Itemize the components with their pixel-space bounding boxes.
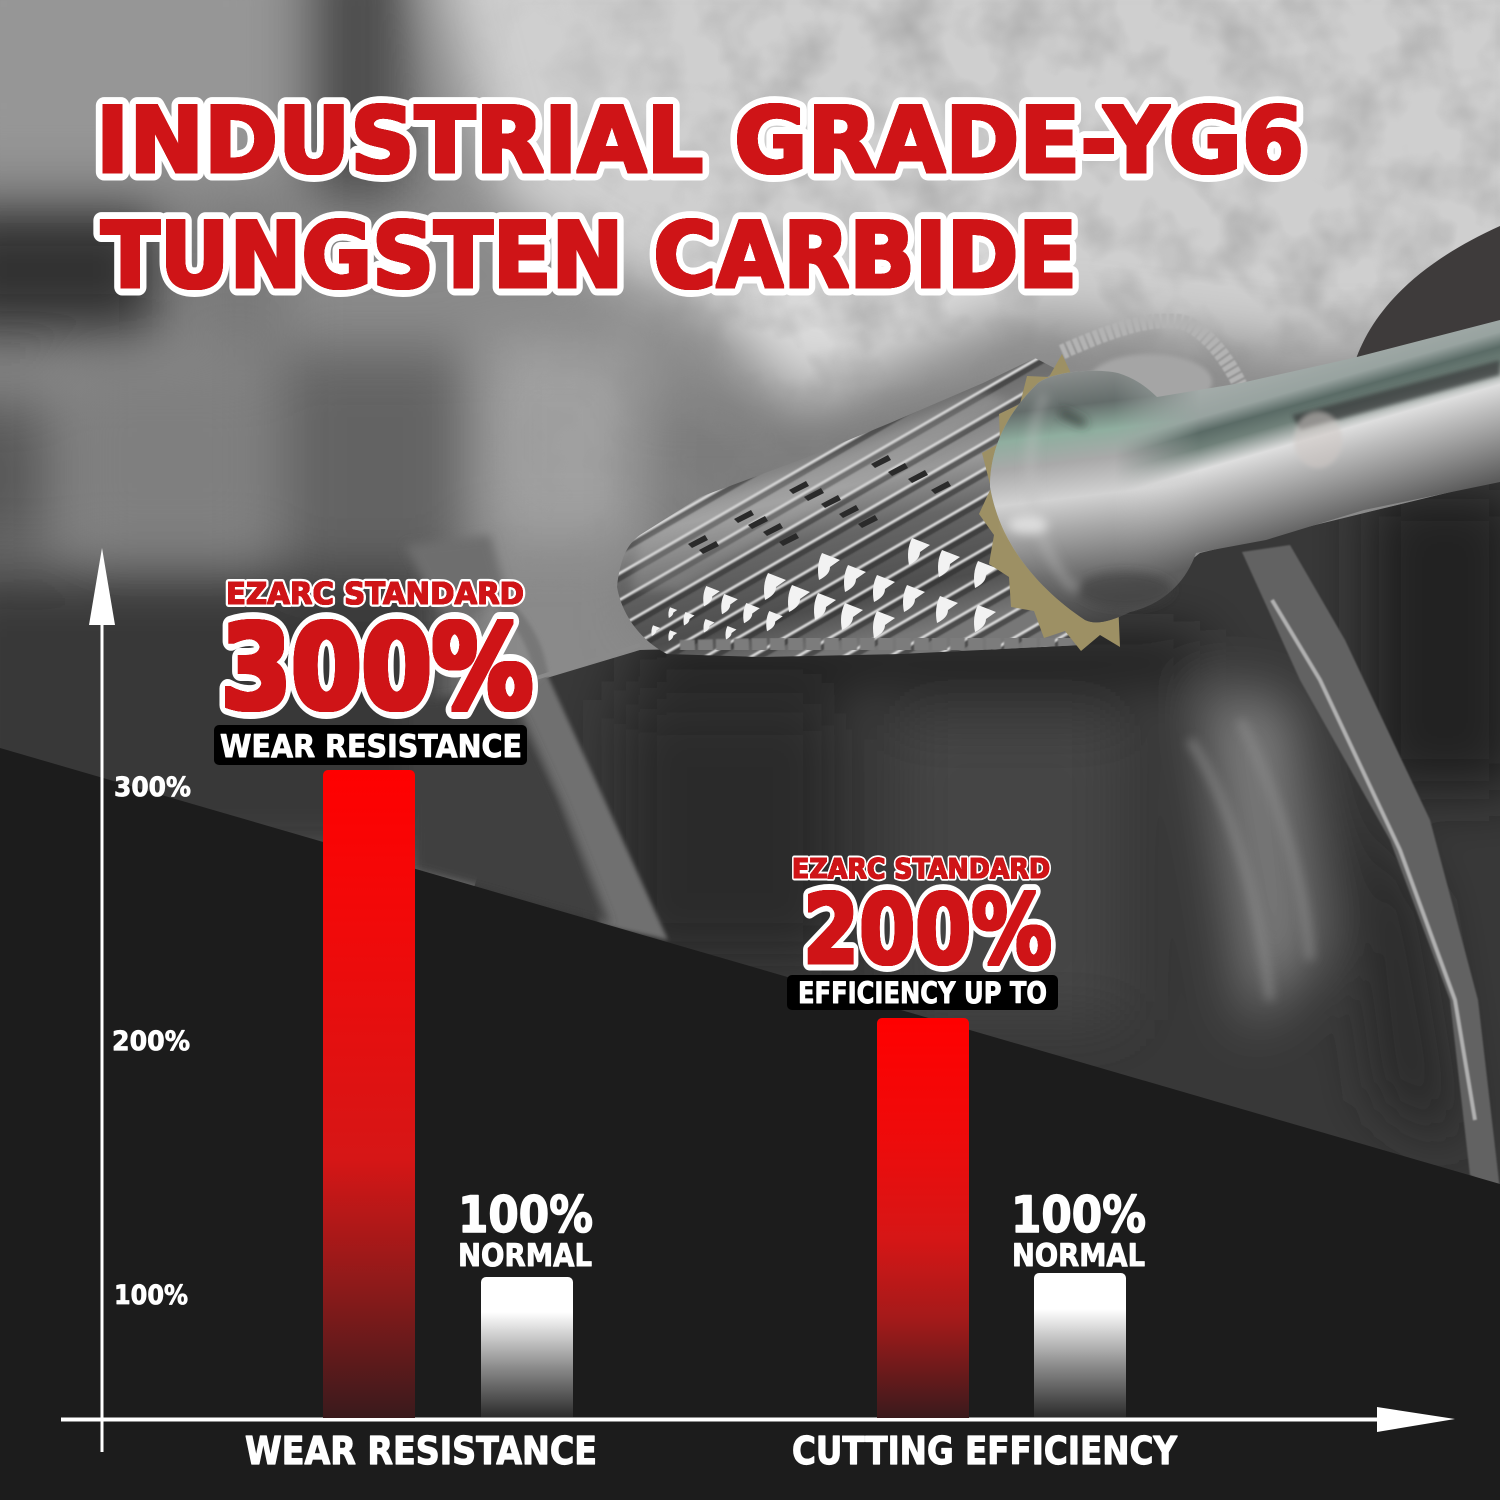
y axis tick labels [112, 772, 191, 1311]
x axis label: cutting efficiency: CUTTING EFFICIENCY [792, 1429, 1177, 1473]
carbide burr tool [600, 320, 1500, 670]
x axis label: wear resistance: WEAR RESISTANCE [245, 1429, 597, 1473]
y axis with arrow [89, 548, 115, 1452]
main title [96, 89, 1304, 309]
main title: TUNGSTEN CARBIDE [101, 204, 1077, 309]
shank logo marks [1292, 360, 1500, 468]
bulb overlay [990, 370, 1189, 622]
label: normal 100% (wear resistance) [458, 1186, 593, 1274]
callout: cutting efficiency 200%: 200% [803, 874, 1052, 986]
label: normal 100% (wear resistance): 100% [458, 1186, 593, 1244]
y axis tick labels: 300% [114, 772, 191, 803]
bulb shading [1008, 395, 1173, 608]
worn disc behind neck [1088, 354, 1212, 410]
label: normal 100% (cutting efficiency): NORMAL [1012, 1238, 1145, 1274]
burr cutting head [617, 358, 1076, 657]
bar: EZARC wear resistance [323, 770, 415, 1418]
workpiece rim [1242, 545, 1500, 1190]
label: normal 100% (wear resistance): NORMAL [458, 1238, 592, 1274]
callout: cutting efficiency 200%: EZARC STANDARD [792, 852, 1050, 885]
shank and bulb [990, 320, 1500, 622]
main title: INDUSTRIAL GRADE-YG6 [96, 89, 1304, 194]
gold braze collar [979, 354, 1120, 651]
label: normal 100% (cutting efficiency): 100% [1011, 1186, 1146, 1244]
dark diagonal chart panel [0, 748, 1500, 1500]
bar: normal wear resistance [481, 1277, 573, 1417]
y axis tick labels: 200% [112, 1026, 190, 1057]
callout: cutting efficiency 200%: EFFICIENCY UP TO [798, 976, 1047, 1010]
textured chip behind tool [1062, 320, 1240, 385]
label: normal 100% (cutting efficiency) [1011, 1186, 1146, 1274]
callout: cutting efficiency 200% [787, 852, 1058, 1010]
bar: normal cutting efficiency [1034, 1273, 1126, 1417]
left disc fragment [405, 535, 505, 620]
callout: wear resistance 300%: EZARC STANDARD [226, 577, 524, 612]
background photo: workshop and workpiece [0, 0, 1500, 1184]
y axis tick labels: 100% [114, 1280, 188, 1311]
callout: wear resistance 300%: WEAR RESISTANCE [220, 729, 522, 765]
x axis with arrow [61, 1407, 1455, 1432]
bar: EZARC cutting efficiency [877, 1018, 969, 1418]
callout: wear resistance 300%: 300% [221, 601, 533, 736]
callout: wear resistance 300% [214, 577, 533, 765]
workpiece body [470, 480, 1500, 1200]
dark disc at right [1353, 226, 1500, 368]
